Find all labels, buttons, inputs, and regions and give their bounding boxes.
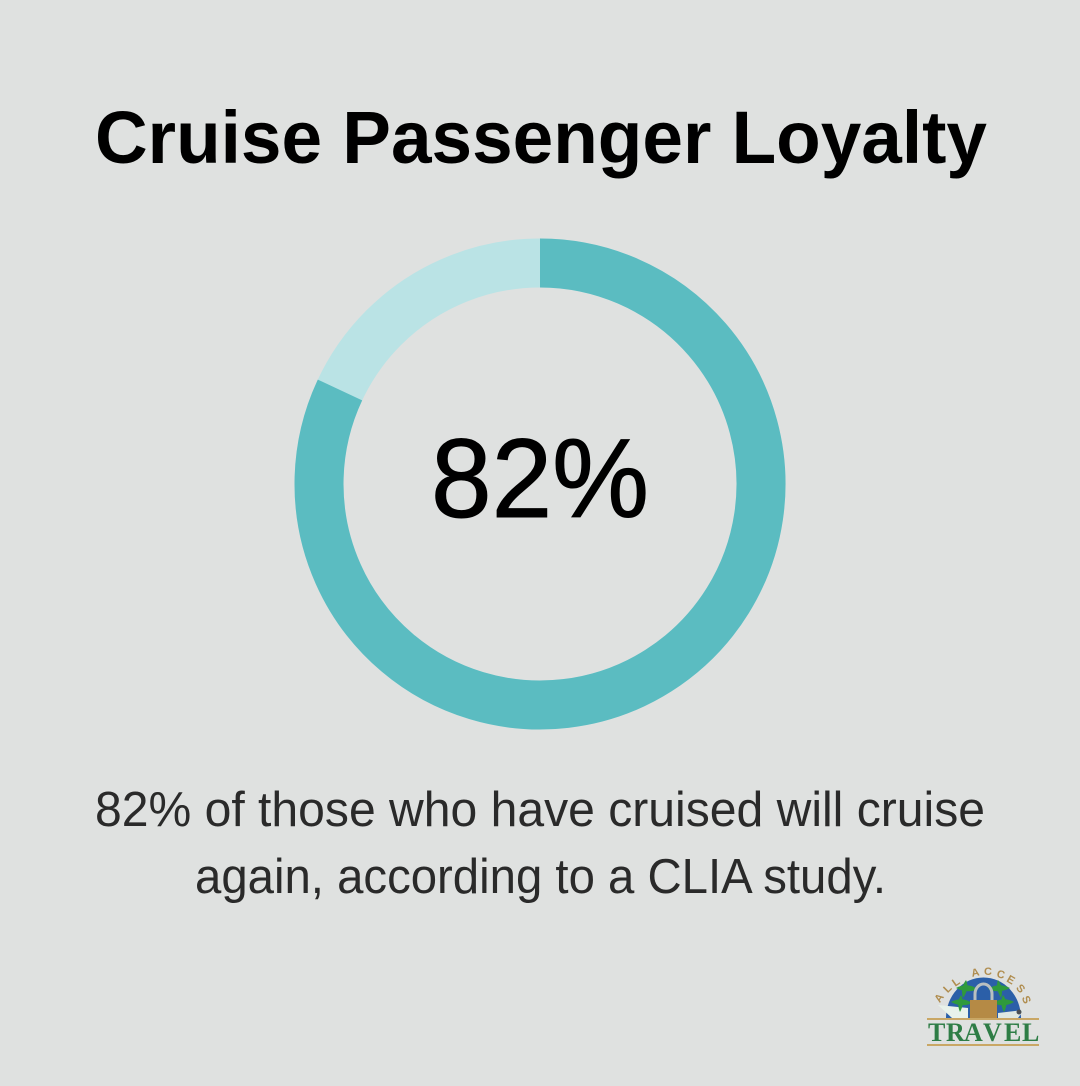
description text: again, according to a CLIA study. [195,850,886,904]
logo arc lettering: L [950,976,963,989]
donut center value: 82% [431,416,649,541]
description text [95,783,985,904]
logo arc lettering: C [984,966,992,978]
logo palm trees [951,980,1014,1012]
logo: All Access Travel [927,966,1039,1047]
logo globe [946,977,1021,1018]
logo arc lettering [932,966,1033,1006]
logo arc lettering: S [1019,994,1033,1006]
donut segment: 82% [319,263,761,705]
description text: 82% of those who have cruised will cruise [95,783,985,837]
logo wordmark: TRAVEL [928,1018,1039,1047]
title: Cruise Passenger Loyalty [95,96,987,179]
donut chart: 82% [319,263,761,705]
logo padlock [975,984,992,1000]
logo ships [938,1005,968,1018]
logo arc lettering: A [970,966,981,980]
logo arc lettering: L [941,982,955,996]
logo arc lettering: A [932,992,947,1005]
logo arc lettering: S [1013,982,1027,996]
logo gold rules [927,1018,1039,1020]
donut track: remaining 18% [319,263,761,705]
logo arc lettering: E [1004,973,1017,987]
logo arc lettering: C [995,968,1006,982]
